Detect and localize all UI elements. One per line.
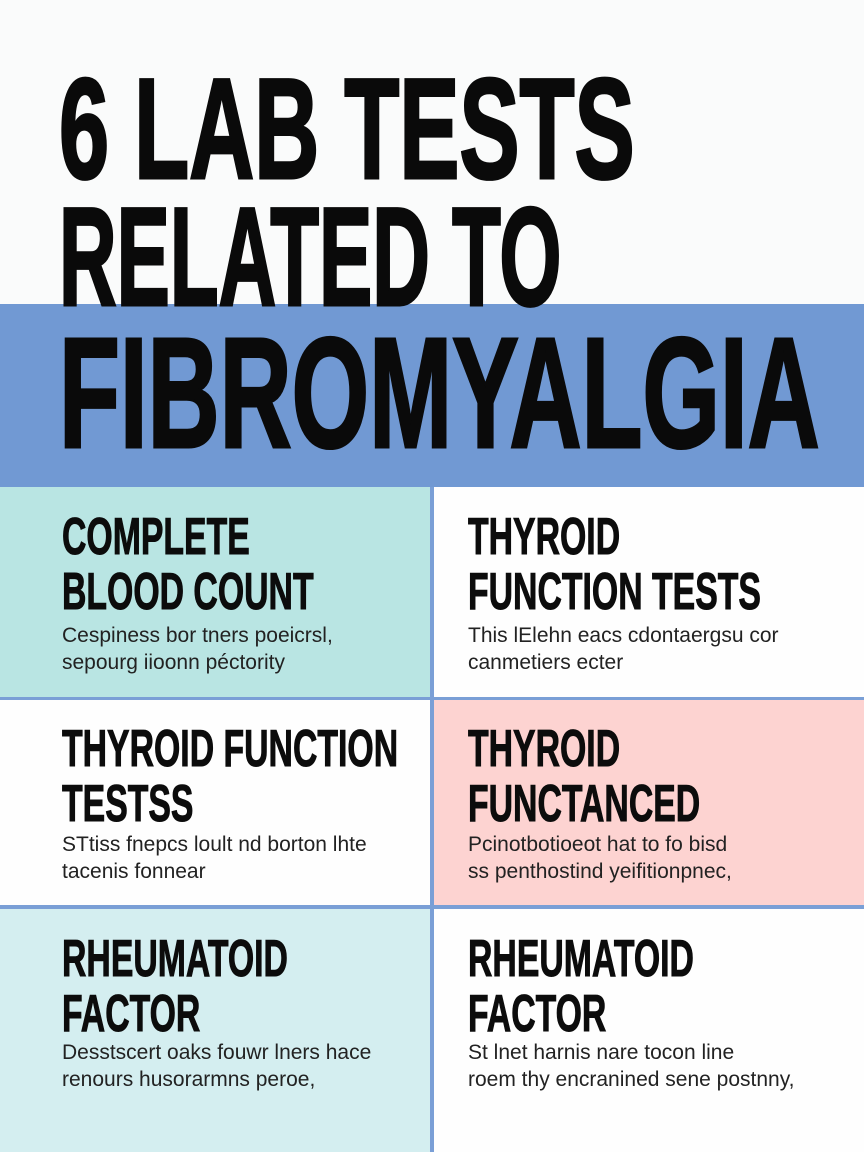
panel: rheumatoid factor right: roem thy encranined sene postnny, — [468, 1068, 794, 1091]
panel: thyroid function tests — [434, 487, 864, 697]
title: FIBROMYALGIA — [59, 306, 820, 481]
panel: thyroid functanced: Pcinotbotioeot hat to fo bisd — [468, 833, 727, 856]
panel: complete blood count: Cespiness bor tners poeicrsl, — [62, 624, 333, 647]
title — [59, 50, 820, 481]
panel: thyroid functanced — [434, 700, 864, 905]
panel: rheumatoid factor right: FACTOR — [468, 985, 606, 1043]
panel: rheumatoid factor left: RHEUMATOID — [62, 930, 288, 988]
panel: thyroid functanced: FUNCTANCED — [468, 775, 700, 833]
panel: thyroid function tests: THYROID — [468, 508, 620, 566]
title: RELATED TO — [59, 178, 561, 335]
panel: rheumatoid factor left — [0, 909, 430, 1152]
panel: thyroid functanced: ss penthostind yeifitionpnec, — [468, 860, 732, 883]
panel: rheumatoid factor right: RHEUMATOID — [468, 930, 694, 988]
panel: rheumatoid factor left: FACTOR — [62, 985, 200, 1043]
panel: rheumatoid factor left: Desstscert oaks fouwr lners hace — [62, 1041, 371, 1064]
panel: complete blood count: BLOOD COUNT — [62, 563, 314, 621]
panel: thyroid function testss: TESTSS — [62, 775, 193, 833]
panel: rheumatoid factor right: St lnet harnis nare tocon line — [468, 1041, 734, 1064]
title: 6 LAB TESTS — [59, 50, 635, 209]
panel: rheumatoid factor left: renours husorarmns peroe, — [62, 1068, 315, 1091]
panel: complete blood count — [0, 487, 430, 697]
panel: thyroid function tests: FUNCTION TESTS — [468, 563, 761, 621]
grid lines background — [0, 487, 864, 1152]
panel: complete blood count: COMPLETE — [62, 508, 250, 566]
panel: rheumatoid factor right — [434, 909, 864, 1152]
panel: thyroid function testss: tacenis fonnear — [62, 860, 206, 883]
panel: thyroid function testss: THYROID FUNCTION — [62, 720, 398, 778]
panel: complete blood count: sepourg iioonn péctority — [62, 651, 285, 674]
panel: thyroid functanced: THYROID — [468, 720, 620, 778]
panel: thyroid function testss: STtiss fnepcs loult nd borton lhte — [62, 833, 367, 856]
panel: thyroid function tests: canmetiers ecter — [468, 651, 623, 674]
panel: thyroid function testss — [0, 700, 430, 905]
panel: thyroid function tests: This lElehn eacs cdontaergsu cor — [468, 624, 778, 647]
blue band — [0, 304, 864, 487]
